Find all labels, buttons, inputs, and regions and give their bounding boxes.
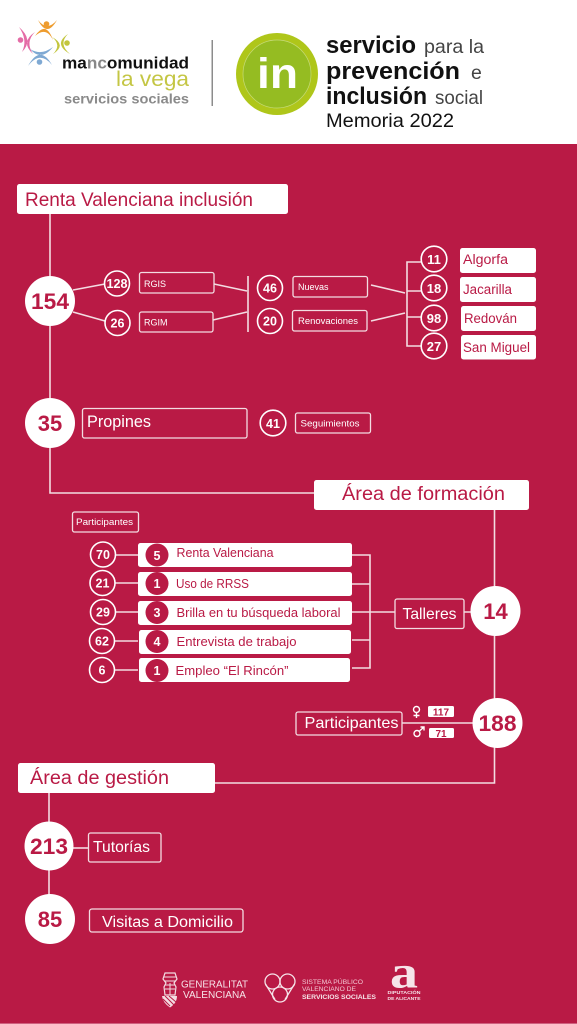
- brand subname: la vega: [116, 68, 189, 91]
- stat: 41 Seguimientos: [260, 410, 370, 436]
- brand tagline: servicios sociales: [64, 90, 189, 106]
- label: Participantes column: Participantes: [76, 517, 134, 527]
- municipality: San Miguel: San Miguel: [463, 340, 530, 355]
- logo: Diputación de Alicante: a: [390, 946, 418, 998]
- stat: 14 Talleres: [395, 586, 520, 636]
- workshop: Entrevista de trabajo: 62: [95, 634, 109, 648]
- icon: male with 71: 71: [435, 729, 447, 740]
- stat: 213 Tutorías: 213: [30, 834, 68, 859]
- connectors: main spine: [49, 214, 494, 900]
- stat: 213 Tutorías: Tutorías: [93, 839, 150, 856]
- stat: 128 RGIS: [104, 271, 214, 296]
- stat: 35 Propines: 35: [38, 411, 62, 436]
- stat: 128 RGIS: RGIS: [144, 279, 166, 289]
- stat: 154: 154: [31, 289, 70, 314]
- logo: Generalitat Valenciana: GENERALITAT: [181, 980, 248, 990]
- stat: 213 Tutorías: [24, 822, 161, 870]
- workshop: Brilla en tu búsqueda laboral: Brilla en tu búsqueda laboral: [176, 606, 340, 620]
- stat: 188 Participantes: [296, 698, 522, 748]
- municipality: San Miguel: 27: [427, 339, 441, 354]
- municipality: Jacarilla: Jacarilla: [463, 282, 512, 297]
- stat: 154: [25, 276, 75, 326]
- stat: 188 Participantes: Participantes: [304, 715, 398, 732]
- logo: Diputación de Alicante: DIPUTACIÓN: [388, 988, 421, 995]
- workshop: Empleo "El Rincón": [90, 658, 350, 682]
- municipality: Redován: Redován: [464, 311, 517, 326]
- stat: 20 Renovaciones: Renovaciones: [298, 316, 359, 326]
- workshop: Renta Valenciana: Renta Valenciana: [176, 546, 274, 560]
- stat: 46 Nuevas: [258, 276, 368, 300]
- logo: Generalitat Valenciana: [162, 973, 248, 1008]
- logo: Generalitat Valenciana: VALENCIANA: [183, 990, 246, 1001]
- title: service name: servicio: [326, 32, 416, 59]
- stat: 26 RGIM: 26: [111, 316, 124, 330]
- icon: male with 71: [414, 727, 454, 740]
- logo: Diputación de Alicante: DE ALICANTE: [388, 996, 420, 1001]
- stat: 41 Seguimientos: 41: [266, 417, 280, 431]
- workshop: Uso de RRSS: [90, 570, 352, 596]
- municipality: San Miguel: [421, 333, 536, 360]
- heading: Área de gestión: [18, 763, 215, 793]
- workshop: Entrevista de trabajo: 4: [154, 635, 161, 649]
- workshop: Uso de RRSS: 1: [154, 577, 161, 591]
- title: service name: para la: [424, 36, 484, 58]
- logo: Sistema Público Valenciano de Servicios Sociales: SERVICIOS SOCIALES: [302, 994, 377, 1001]
- stat: 85 Visitas a Domicilio: 85: [38, 907, 62, 932]
- workshop: Empleo "El Rincón": 1: [154, 664, 161, 678]
- logo: in circle: in: [257, 50, 298, 98]
- municipality: Redován: [421, 305, 536, 331]
- stat: 35 Propines: [25, 398, 247, 448]
- stat: 46 Nuevas: Nuevas: [298, 282, 329, 292]
- municipality: Jacarilla: [421, 275, 536, 302]
- stat: 41 Seguimientos: Seguimientos: [300, 418, 360, 428]
- workshop: Entrevista de trabajo: Entrevista de trabajo: [176, 635, 297, 649]
- workshop: Brilla en tu búsqueda laboral: [90, 600, 352, 625]
- stat: 35 Propines: Propines: [87, 413, 151, 431]
- brand name: mancomunidad: [62, 54, 189, 72]
- stat: 85 Visitas a Domicilio: [25, 894, 243, 944]
- icon: female with 117: [414, 706, 454, 718]
- logo: in circle: [236, 33, 318, 115]
- logo: Diputación de Alicante: [388, 946, 421, 1001]
- icon: female with 117: 117: [433, 708, 450, 718]
- stat: 26 RGIM: RGIM: [144, 318, 168, 328]
- municipality: Algorfa: Algorfa: [463, 252, 509, 267]
- stat: 85 Visitas a Domicilio: Visitas a Domicilio: [102, 914, 233, 931]
- logo: Sistema Público Valenciano de Servicios Sociales: VALENCIANO DE: [302, 986, 357, 993]
- stat: 14 Talleres: 14: [483, 599, 508, 624]
- workshop: Uso de RRSS: Uso de RRSS: [176, 577, 249, 591]
- heading: Renta Valenciana inclusión: [17, 184, 288, 214]
- workshop: Renta Valenciana: [90, 542, 352, 567]
- workshop: Brilla en tu búsqueda laboral: 3: [154, 606, 161, 620]
- workshop: Brilla en tu búsqueda laboral: 29: [96, 606, 110, 620]
- stat: 188 Participantes: 188: [478, 711, 516, 736]
- workshop: Renta Valenciana: 70: [96, 548, 110, 562]
- title: service name: [326, 32, 484, 132]
- logo: Sistema Público Valenciano de Servicios Sociales: [265, 974, 377, 1002]
- heading: Renta Valenciana inclusión: Renta Valenciana inclusión: [25, 189, 253, 211]
- header background: [0, 0, 577, 144]
- title: service name: social: [435, 87, 483, 109]
- workshop: Empleo "El Rincón": 6: [99, 664, 106, 678]
- title: service name: prevención: [326, 58, 460, 85]
- stat: 26 RGIM: [105, 310, 213, 336]
- stat: 20 Renovaciones: 20: [263, 314, 277, 328]
- workshop: Renta Valenciana: 5: [154, 549, 161, 563]
- municipality: Algorfa: 11: [427, 252, 441, 267]
- logo: mancomunidad la vega: [18, 20, 189, 106]
- stat: 20 Renovaciones: [258, 308, 367, 334]
- municipality: Redován: 98: [427, 311, 441, 326]
- stat: 14 Talleres: Talleres: [402, 606, 456, 623]
- workshop: Entrevista de trabajo: [90, 628, 351, 654]
- heading: Área de gestión: Área de gestión: [30, 768, 169, 789]
- logo: Sistema Público Valenciano de Servicios Sociales: SISTEMA PÚBLICO: [302, 977, 363, 986]
- title: service name: Memoria 2022: [326, 110, 454, 132]
- municipality: Jacarilla: 18: [427, 281, 441, 296]
- title: service name: e: [471, 62, 482, 84]
- heading: Área de formación: [314, 480, 529, 510]
- title: service name: inclusión: [326, 83, 427, 110]
- label: Participantes column: [72, 512, 138, 532]
- workshop: Uso de RRSS: 21: [96, 576, 109, 590]
- stat: 46 Nuevas: 46: [263, 282, 277, 296]
- municipality: Algorfa: [421, 246, 536, 273]
- stat: 128 RGIS: 128: [106, 277, 128, 291]
- icon: four figures: [18, 20, 70, 66]
- heading: Área de formación: Área de formación: [342, 484, 505, 505]
- workshop: Empleo "El Rincón": Empleo “El Rincón”: [176, 664, 288, 678]
